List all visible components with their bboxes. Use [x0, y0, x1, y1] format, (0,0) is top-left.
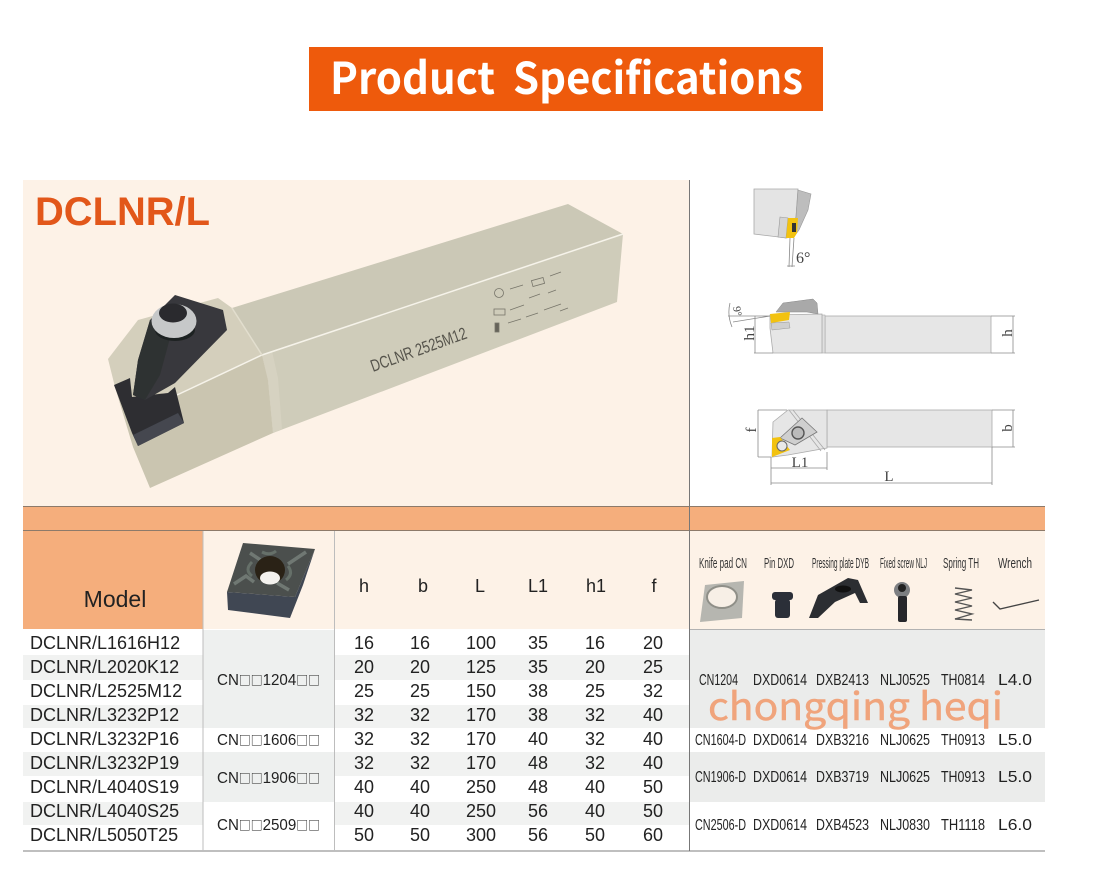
table column: insert codes: CN□□1606□□ [217, 730, 320, 749]
icon: fixed screw [894, 582, 910, 622]
table: dimension values: 48 [528, 753, 548, 773]
table column: model names [30, 633, 182, 845]
drawing: top view: f [744, 428, 760, 432]
table: dimension values: 40 [410, 801, 430, 821]
table: accessory part numbers: TH0814 [941, 672, 985, 689]
icon: wrench [993, 600, 1039, 609]
table: dimension values: 40 [528, 729, 548, 749]
drawing: top view: b [1000, 424, 1016, 432]
table: accessory part numbers: L6.0 [998, 817, 1032, 834]
clamp and screw [133, 295, 227, 400]
table column: insert codes [217, 670, 320, 834]
table column: insert codes: CN□□1204□□ [217, 670, 320, 689]
table: accessory part numbers: DXD0614 [753, 817, 807, 834]
table: accessory part numbers: DXB3216 [816, 732, 869, 749]
table: accessory part numbers: DXB2413 [816, 672, 869, 689]
table: dimension values: 40 [354, 801, 374, 821]
table: dimension values: 20 [410, 657, 430, 677]
table: accessory part numbers: CN1204 [699, 672, 738, 689]
table column: model names: DCLNR/L4040S19 [30, 777, 179, 797]
table: dimension values: 32 [354, 729, 374, 749]
table column: model names: DCLNR/L5050T25 [30, 825, 178, 845]
title banner: Specifications [513, 43, 803, 107]
table: dimension values: 50 [643, 777, 663, 797]
table: dimension values: 20 [643, 633, 663, 653]
table: dimension values: 35 [528, 657, 548, 677]
table: dimension values: 50 [643, 801, 663, 821]
table column: insert codes: CN□□2509□□ [217, 815, 320, 834]
table header: accessory labels and icons: Spring TH [943, 555, 979, 572]
table: dimension values: 40 [585, 801, 605, 821]
engraved part markings [494, 272, 568, 332]
drawing: top view: L [884, 469, 894, 485]
panel: technical drawings [728, 189, 1016, 485]
title banner [309, 43, 823, 111]
table: accessory part numbers: NLJ0625 [880, 769, 930, 786]
table column: model names: DCLNR/L2020K12 [30, 657, 179, 677]
table header: accessory labels and icons: Knife pad CN [699, 555, 747, 572]
table: dimension values: 32 [410, 753, 430, 773]
drawing: top view: L1 [792, 455, 808, 471]
table: accessory part numbers: CN1604-D [695, 732, 746, 749]
table: dimension values: 32 [410, 705, 430, 725]
table: dimension values: 60 [643, 825, 663, 845]
table: dimension values: 56 [528, 825, 548, 845]
table header: dimension labels: L [475, 576, 485, 596]
table header: accessory labels and icons [699, 555, 1039, 622]
table: accessory part numbers: NLJ0830 [880, 817, 930, 834]
watermark: chongqing heqi [708, 676, 1003, 731]
icon: spring [955, 588, 972, 620]
table: dimension values: 150 [466, 681, 496, 701]
table: dimension values: 20 [585, 657, 605, 677]
icon: knife pad [700, 581, 744, 622]
table: dimension values: 32 [643, 681, 663, 701]
table: accessory part numbers: CN2506-D [695, 817, 746, 834]
engraved model text: DCLNR 2525M12 [368, 324, 469, 376]
table header: dimension labels: f [651, 576, 657, 596]
icon: pin [772, 592, 793, 618]
table: accessory part numbers: DXD0614 [753, 672, 807, 689]
panel: product photo [23, 180, 689, 506]
product name heading: DCLNR/L [35, 190, 210, 234]
drawing: end view with 6 degree angle [754, 189, 811, 267]
table: dimension values: 56 [528, 801, 548, 821]
table: dimension values: 170 [466, 729, 496, 749]
table: dimension values: 250 [466, 801, 496, 821]
table: dimension values: 25 [585, 681, 605, 701]
table column: model names: DCLNR/L3232P19 [30, 753, 179, 773]
table: dimension values: 25 [643, 657, 663, 677]
table: specification background bands [23, 180, 1045, 851]
table: accessory part numbers: L4.0 [998, 672, 1032, 689]
table: dimension values: 40 [585, 777, 605, 797]
table: dimension values: 20 [354, 657, 374, 677]
table column: model names: DCLNR/L4040S25 [30, 801, 179, 821]
table: dimension values: 170 [466, 753, 496, 773]
table: dimension values [354, 633, 663, 845]
table: dimension values: 16 [354, 633, 374, 653]
table: dimension values: 40 [643, 753, 663, 773]
table: dimension values: 40 [354, 777, 374, 797]
table: dimension values: 50 [585, 825, 605, 845]
table: dimension values: 250 [466, 777, 496, 797]
table header: dimension labels: h1 [586, 576, 606, 596]
table header: dimension labels: h [359, 576, 369, 596]
cutting insert [114, 378, 184, 446]
table: dimension values: 32 [585, 729, 605, 749]
table: dimension values: 25 [410, 681, 430, 701]
table: dimension values: 32 [354, 753, 374, 773]
table header: accessory labels and icons: Fixed screw NLJ [880, 555, 927, 572]
table: dimension values: 40 [643, 729, 663, 749]
table: accessory part numbers: DXB3719 [816, 769, 869, 786]
table column: model names: DCLNR/L2525M12 [30, 681, 182, 701]
table: dimension values: 32 [585, 705, 605, 725]
table header: dimension labels [359, 576, 657, 596]
table: dimension values: 32 [410, 729, 430, 749]
table column: model names: DCLNR/L3232P12 [30, 705, 179, 725]
table: dimension values: 50 [354, 825, 374, 845]
table header: accessory labels and icons: Pin DXD [764, 555, 794, 572]
table: dimension values: 25 [354, 681, 374, 701]
table: dimension values: 50 [410, 825, 430, 845]
drawing: side view: 9° [730, 305, 744, 317]
table: accessory part numbers: TH1118 [941, 817, 985, 834]
drawing: side view [728, 299, 1016, 353]
table header: dimension labels: L1 [528, 576, 548, 596]
drawing: side view: h1 [742, 326, 758, 340]
table: dimension values: 16 [585, 633, 605, 653]
table header: accessory labels and icons: Wrench [998, 555, 1032, 572]
icon: CNMG insert [227, 543, 315, 618]
table header: model: Model [84, 586, 146, 612]
table column: model names: DCLNR/L1616H12 [30, 633, 180, 653]
table: dimension values: 38 [528, 681, 548, 701]
table: dimension values: 38 [528, 705, 548, 725]
table: accessory part numbers: CN1906-D [695, 769, 746, 786]
drawing: side view: h [1000, 329, 1016, 337]
table: dimension values: 40 [643, 705, 663, 725]
table: accessory part numbers: DXD0614 [753, 769, 807, 786]
table: dimension values: 32 [354, 705, 374, 725]
table: accessory part numbers [695, 672, 1032, 834]
table: dimension values: 170 [466, 705, 496, 725]
table: accessory part numbers: NLJ0625 [880, 732, 930, 749]
table header: accessory labels and icons: Pressing plate DYB [812, 555, 869, 572]
table column: insert codes: CN□□1906□□ [217, 768, 320, 787]
table: accessory part numbers: DXD0614 [753, 732, 807, 749]
table: dimension values: 300 [466, 825, 496, 845]
table: dimension values: 40 [410, 777, 430, 797]
table: dimension values: 35 [528, 633, 548, 653]
icon: pressing plate [809, 578, 868, 618]
table: accessory part numbers: L5.0 [998, 732, 1032, 749]
table: accessory part numbers: DXB4523 [816, 817, 869, 834]
table: dimension values: 16 [410, 633, 430, 653]
table: dimension values: 32 [585, 753, 605, 773]
drawing: end view with 6 degree angle: 6° [796, 250, 810, 267]
table column: model names: DCLNR/L3232P16 [30, 729, 179, 749]
drawing: top view [744, 410, 1016, 485]
table: dimension values: 100 [466, 633, 496, 653]
illustration: turning tool holder [108, 204, 623, 488]
table: accessory part numbers: TH0913 [941, 732, 985, 749]
table: dimension values: 48 [528, 777, 548, 797]
title banner: Product [330, 43, 495, 107]
table: accessory part numbers: TH0913 [941, 769, 985, 786]
table header: dimension labels: b [418, 576, 428, 596]
table: dimension values: 125 [466, 657, 496, 677]
table: accessory part numbers: L5.0 [998, 769, 1032, 786]
table: accessory part numbers: NLJ0525 [880, 672, 930, 689]
